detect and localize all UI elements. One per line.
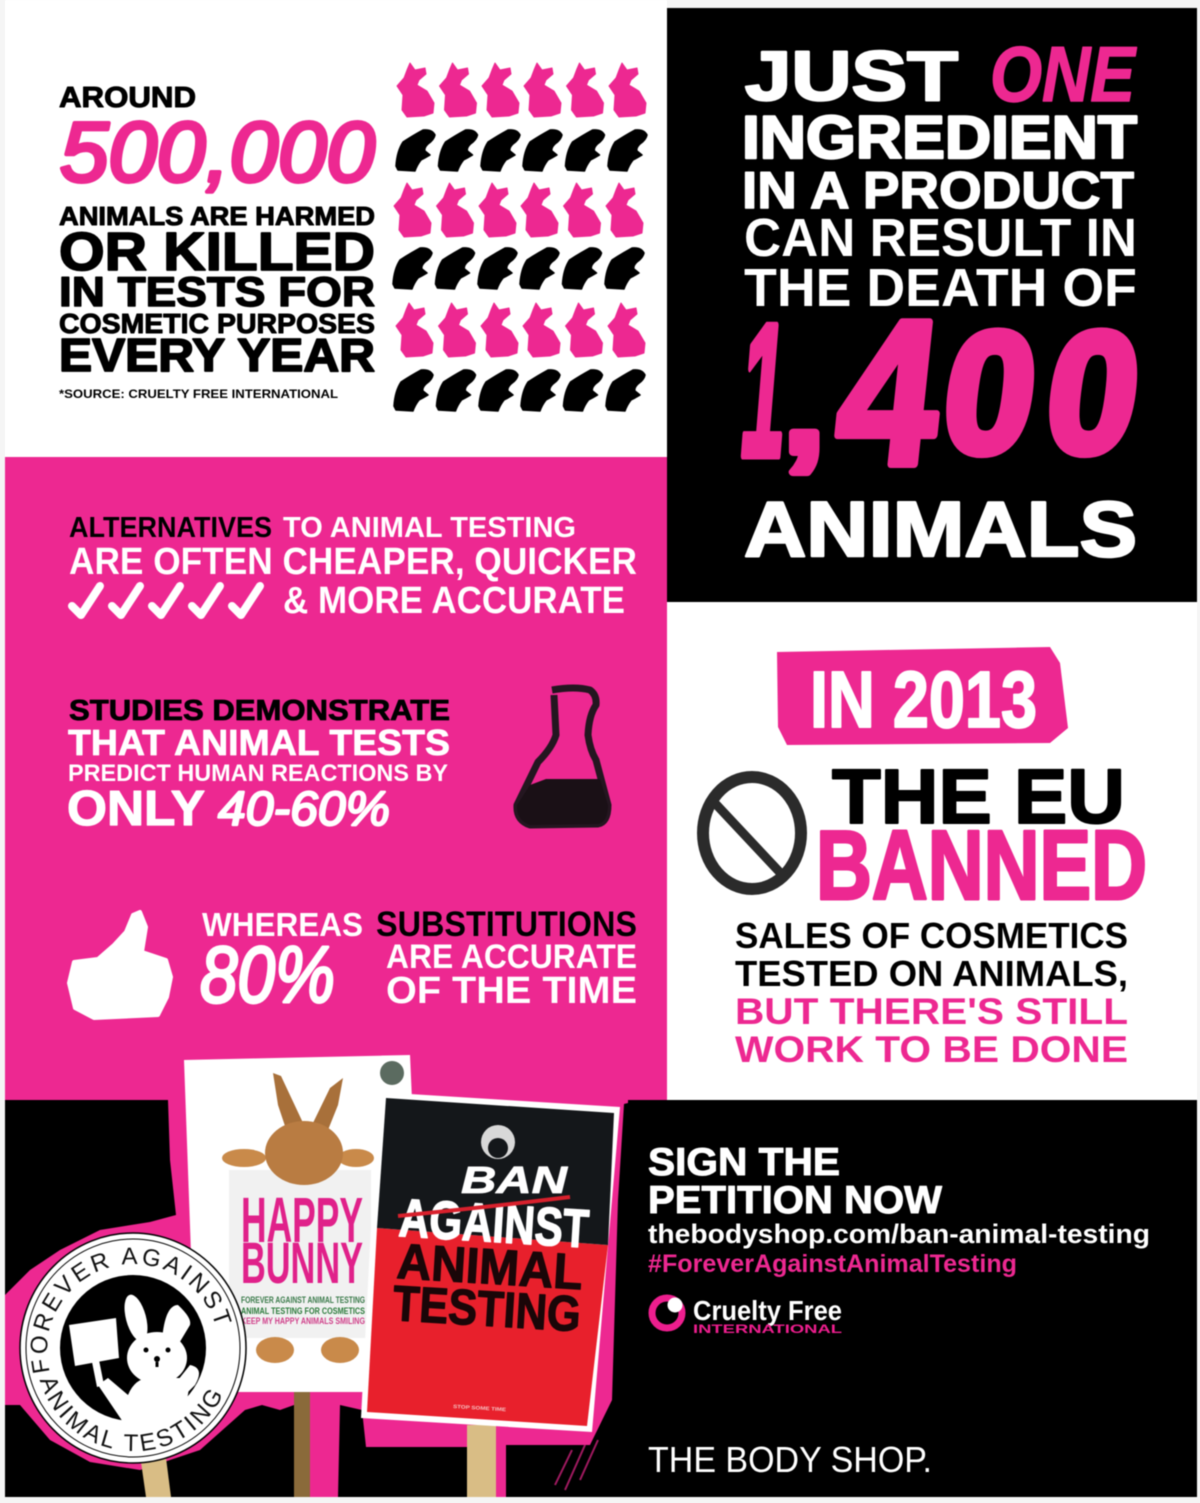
testing: TESTING xyxy=(391,1275,582,1342)
are accurate: ARE ACCURATE xyxy=(386,938,637,976)
black half xyxy=(377,1098,614,1245)
text block: substitutions xyxy=(200,905,637,1019)
the eu: THE EU xyxy=(832,754,1125,840)
cruelty free: Cruelty Free xyxy=(693,1295,842,1326)
black guinea pigs row 3 xyxy=(394,370,645,411)
whereas: WHEREAS xyxy=(202,906,363,943)
banner: in 2013 xyxy=(777,647,1068,745)
small print: FOREVER AGAINST ANIMAL TESTING xyxy=(241,1295,365,1305)
text block: alternatives xyxy=(69,512,637,622)
in tests for: IN TESTS FOR xyxy=(59,268,375,315)
logo xyxy=(481,1125,515,1159)
hashtag: #ForeverAgainstAnimalTesting xyxy=(648,1250,1017,1278)
big number 1,400: 4 xyxy=(827,278,952,508)
the death of: THE DEATH OF xyxy=(744,258,1137,318)
only: ONLY xyxy=(67,782,205,836)
big number 1,400 xyxy=(741,278,1150,508)
every year: EVERY YEAR xyxy=(59,329,375,381)
source: *SOURCE: CRUELTY FREE INTERNATIONAL xyxy=(59,387,338,401)
url: thebodyshop.com/ban-animal-testing xyxy=(648,1219,1150,1249)
just: JUST xyxy=(745,37,958,115)
alternatives: ALTERNATIVES xyxy=(69,512,272,544)
in a product: IN A PRODUCT xyxy=(742,162,1134,220)
small print xyxy=(241,1295,365,1326)
more accurate: & MORE ACCURATE xyxy=(283,580,625,622)
ingredient: INGREDIENT xyxy=(742,104,1137,171)
small print: ANIMAL TESTING FOR COSMETICS xyxy=(241,1306,365,1316)
sign the: SIGN THE xyxy=(648,1141,840,1184)
one: ONE xyxy=(990,30,1137,118)
panel: top-left white xyxy=(5,0,667,457)
icon: prohibition sign xyxy=(703,777,801,889)
text block: eu banned xyxy=(735,754,1147,1070)
predict human reactions: PREDICT HUMAN REACTIONS BY xyxy=(68,760,448,787)
or killed: OR KILLED xyxy=(59,222,375,282)
pink rabbits row 1 xyxy=(397,63,646,117)
tested on animals: TESTED ON ANIMALS, xyxy=(735,953,1128,994)
pink rabbits row 2 xyxy=(394,183,643,237)
red half xyxy=(367,1228,608,1426)
post: happy bunny sign xyxy=(294,1385,310,1497)
40-60 percent: 40-60% xyxy=(218,783,390,836)
text block: studies xyxy=(67,695,450,836)
text block: 500,000 animals xyxy=(59,82,375,401)
badge top text: FOREVER AGAINST xyxy=(30,1246,232,1374)
panel: pink alternatives xyxy=(5,457,667,1100)
red strike xyxy=(398,1197,570,1216)
big number 1,400: 0 xyxy=(933,297,1047,489)
badge bottom text: ANIMAL TESTING xyxy=(39,1379,222,1452)
panel: black footer xyxy=(5,1100,1197,1497)
back feet xyxy=(256,1337,359,1363)
panel: black one ingredient xyxy=(667,8,1197,602)
petition now: PETITION NOW xyxy=(648,1179,942,1222)
big number 500,000: 500,000 xyxy=(60,105,375,199)
big number 1,400: , xyxy=(783,334,825,480)
logo: the body shop: THE BODY SHOP. xyxy=(648,1439,932,1480)
animals: ANIMALS xyxy=(744,485,1137,573)
rabbit front paws xyxy=(222,1149,374,1167)
black guinea pigs row 2 xyxy=(393,248,644,289)
rabbit head xyxy=(265,1121,343,1185)
work to be done: WORK TO BE DONE xyxy=(735,1029,1128,1070)
against: AGAINST xyxy=(397,1188,591,1260)
80 percent: 80% xyxy=(200,930,335,1019)
card xyxy=(229,1170,371,1338)
badge: forever against animal testing xyxy=(18,1231,248,1465)
big number 1,400: 1 xyxy=(741,285,785,497)
bunny with placard xyxy=(69,1292,199,1425)
sales of cosmetics: SALES OF COSMETICS xyxy=(735,915,1128,956)
icon: thumbs up xyxy=(69,912,171,1018)
rabbit photo ears xyxy=(273,1073,343,1135)
post: badge xyxy=(140,1450,171,1497)
to animal testing: TO ANIMAL TESTING xyxy=(283,512,576,544)
icon: flask xyxy=(517,688,608,825)
sign: ban animal testing xyxy=(361,1092,620,1432)
animals are harmed: ANIMALS ARE HARMED xyxy=(59,201,375,231)
pink rabbits row 3 xyxy=(396,303,645,357)
ban: BAN xyxy=(461,1160,569,1202)
still: BUT THERE'S STILL xyxy=(735,991,1128,1032)
animal: ANIMAL xyxy=(395,1233,584,1300)
text block: sign the petition xyxy=(648,1141,1150,1278)
panel: right white xyxy=(667,602,1197,1100)
of the time: OF THE TIME xyxy=(386,970,637,1012)
small logo xyxy=(380,1061,404,1085)
in 2013 label: IN 2013 xyxy=(810,655,1037,744)
small print: KEEP MY HAPPY ANIMALS SMILING xyxy=(241,1316,365,1326)
text block: just one ingredient xyxy=(741,30,1150,573)
international: INTERNATIONAL xyxy=(693,1322,842,1336)
bunny: BUNNY xyxy=(241,1231,363,1296)
logo: cruelty free international xyxy=(652,1295,842,1336)
that animal tests: THAT ANIMAL TESTS xyxy=(68,722,450,763)
can result in: CAN RESULT IN xyxy=(744,208,1137,268)
bunny face xyxy=(144,1348,170,1367)
sign: happy bunny xyxy=(184,1055,412,1392)
brush background behind signs xyxy=(5,1100,640,1497)
substitutions: SUBSTITUTIONS xyxy=(376,905,637,944)
big number 1,400: 0 xyxy=(1036,297,1150,489)
happy: HAPPY xyxy=(241,1184,363,1256)
icon: five ticks xyxy=(72,586,260,615)
around: AROUND xyxy=(59,82,196,114)
small print: STOP SOME TIME xyxy=(453,1404,507,1413)
studies demonstrate: STUDIES DEMONSTRATE xyxy=(69,695,450,727)
black guinea pigs row 1 xyxy=(396,130,647,171)
post: ban sign xyxy=(467,1425,496,1497)
pictogram grid: rabbits and guinea pigs xyxy=(393,63,647,411)
cosmetic purposes: COSMETIC PURPOSES xyxy=(59,308,375,339)
cheaper quicker: ARE OFTEN CHEAPER, QUICKER xyxy=(69,541,637,583)
